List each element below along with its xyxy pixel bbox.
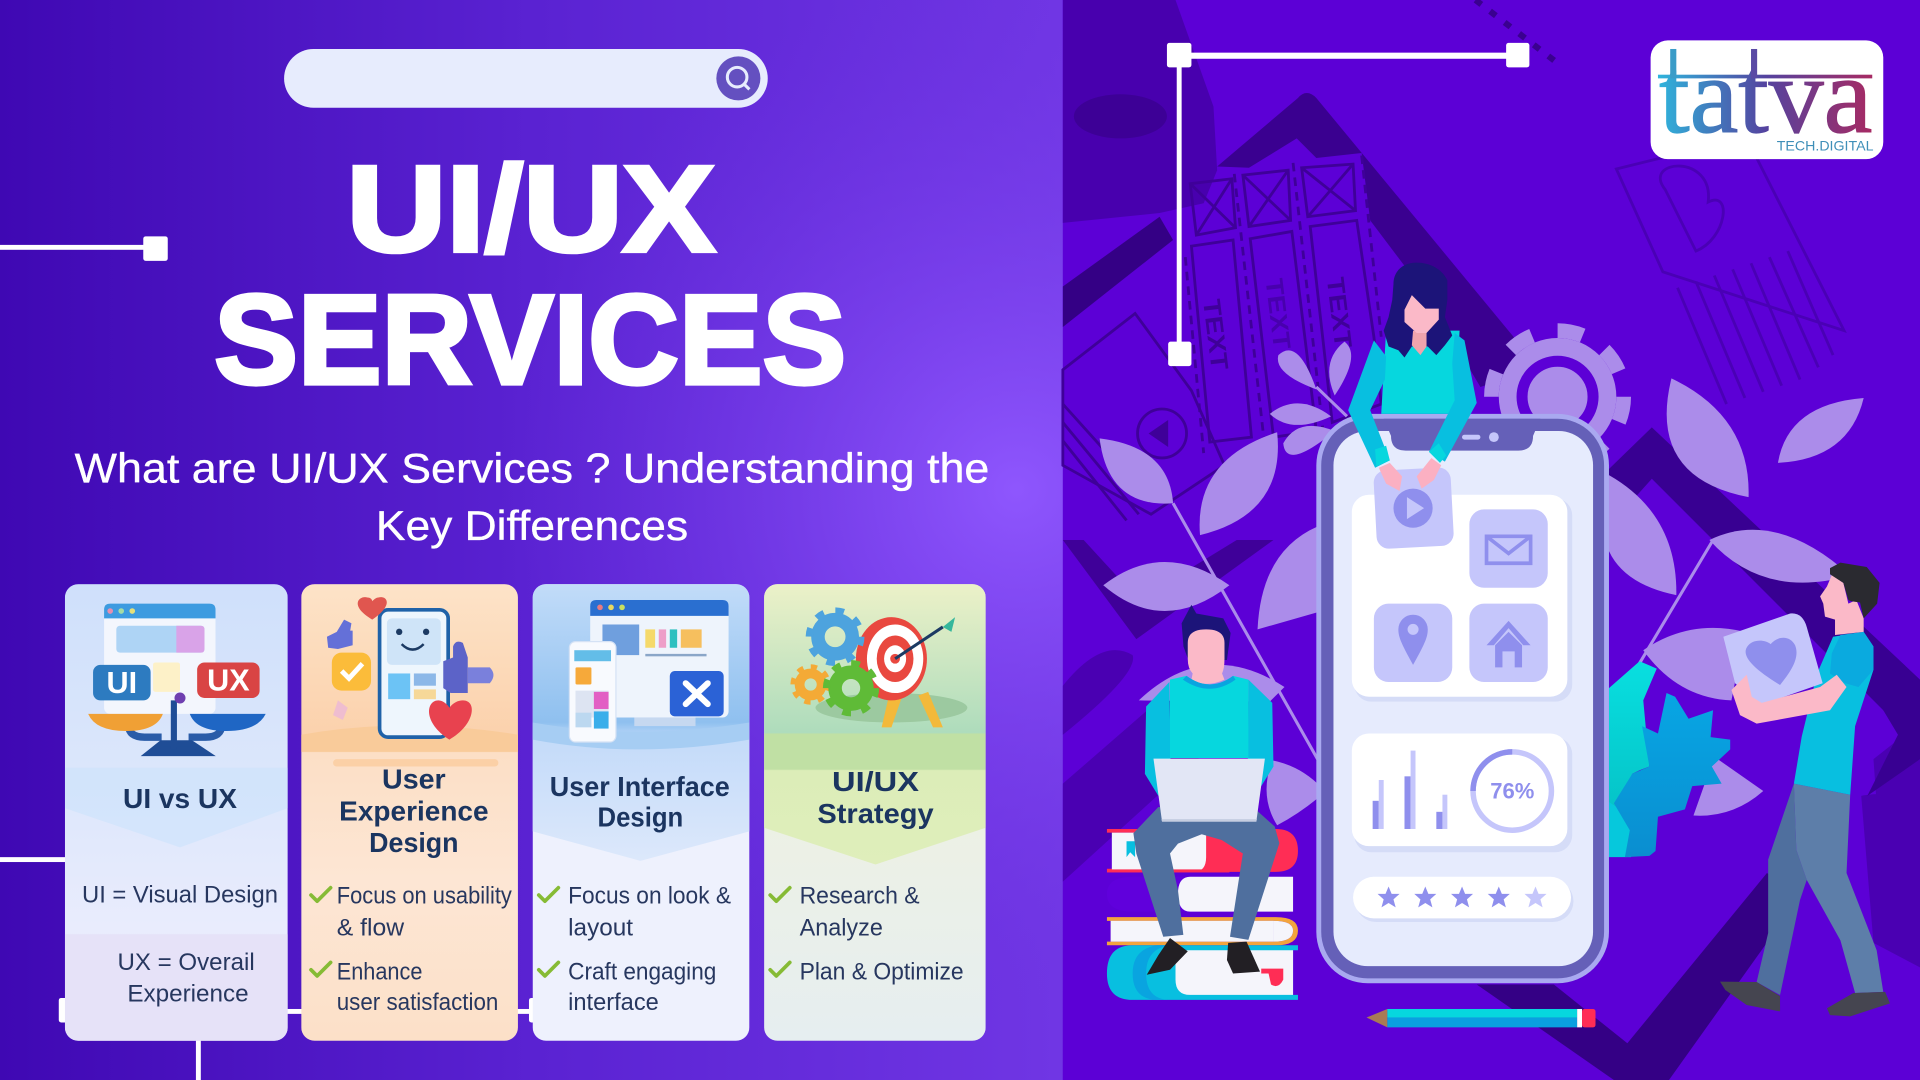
subtitle: Key Differences	[376, 502, 688, 549]
leaves and gear behind phone	[1100, 331, 1864, 825]
subtitle: What are UI/UX Services ? Understanding the	[75, 444, 989, 491]
text: UI equals visual design: UI = Visual Design	[82, 881, 278, 908]
list: usability and satisfaction: & flow	[337, 915, 405, 942]
panel: left purple background	[0, 0, 1063, 1080]
panel: right background with wireframe pattern	[1063, 0, 1920, 1080]
panel: UI vs UX card	[65, 584, 288, 1041]
illustration: books stack	[1107, 829, 1298, 1000]
icon: desktop and mobile interface	[569, 600, 729, 742]
connector: left upper handle	[0, 236, 168, 261]
list: look and engagement: Focus on look &	[568, 883, 731, 910]
panel: right background with wireframe pattern: TEXT	[1260, 277, 1295, 351]
list: research and optimize: Research &	[800, 883, 920, 910]
title: SERVICES	[214, 268, 846, 410]
screen card: chart and 76 percent gauge	[1352, 733, 1572, 852]
panel: User Experience Design card	[301, 584, 518, 1041]
text: UX equals overall experience	[118, 949, 255, 1008]
heading: User Experience Design	[339, 764, 489, 858]
screen card: star rating	[1353, 877, 1573, 922]
list: usability and satisfaction: Focus on usability	[337, 883, 512, 910]
text: UX equals overall experience: Experience	[127, 981, 249, 1008]
list: usability and satisfaction: user satisfaction	[337, 989, 498, 1016]
heading: User Experience Design: User	[382, 764, 446, 795]
list: look and engagement: layout	[568, 915, 633, 942]
list: usability and satisfaction: Enhance	[337, 959, 422, 986]
heading: UI vs UX: UI vs UX	[123, 783, 237, 814]
heading: UI/UX Strategy: UI/UX	[832, 766, 919, 797]
list: look and engagement: Craft engaging	[568, 959, 716, 986]
icon: UI UX balance scale: UX	[207, 664, 250, 698]
heading: User Interface Design: User Interface	[550, 771, 730, 802]
screen card: app tiles	[1352, 495, 1572, 702]
icon: UI UX balance scale	[88, 604, 266, 753]
icon: UI UX balance scale: UI	[107, 666, 137, 700]
panel: right background with wireframe pattern: TEXT	[1321, 276, 1356, 349]
heading: User Experience Design: Design	[369, 827, 459, 858]
panel: UI/UX Strategy card	[764, 584, 986, 1041]
screen card: chart and 76 percent gauge: 76%	[1490, 778, 1535, 803]
illustration: standing man with heart tablet	[1720, 563, 1890, 1016]
illustration: seated man with laptop	[1133, 605, 1279, 975]
panel: right background with wireframe pattern: TEXT	[1197, 298, 1233, 372]
list: look and engagement: interface	[568, 989, 659, 1016]
heading: User Interface Design	[550, 771, 730, 833]
list: usability and satisfaction	[311, 883, 512, 1016]
text: UX equals overall experience: UX = Overail	[118, 949, 255, 976]
heading: UI/UX Strategy	[817, 766, 934, 829]
panel: User Interface Design card	[533, 584, 749, 1041]
list: look and engagement	[539, 883, 731, 1016]
bracket: white handles top right	[1167, 43, 1529, 366]
list: research and optimize: Analyze	[800, 915, 883, 942]
icon: smiling phone with thumbs and heart	[327, 597, 493, 740]
subtitle	[75, 444, 989, 549]
illustration: pencil	[1367, 1009, 1596, 1027]
heading: User Interface Design: Design	[598, 802, 683, 833]
list: research and optimize: Plan & Optimize	[800, 959, 964, 986]
heading: User Experience Design: Experience	[339, 795, 489, 826]
title: UI/UX	[347, 140, 715, 277]
connectors behind cards	[0, 857, 536, 1080]
logo: tatva tech digital: TECH.DIGITAL	[1777, 138, 1874, 154]
list: research and optimize	[770, 883, 964, 986]
play tile	[1373, 467, 1454, 549]
heading: UI/UX Strategy: Strategy	[817, 798, 934, 829]
search bar	[284, 49, 768, 108]
logo: tatva tech digital: tatva	[1659, 37, 1872, 156]
illustration: blue plant	[1609, 661, 1730, 857]
illustration: phone	[1316, 414, 1609, 983]
title	[214, 140, 846, 410]
illustration: woman leaning over phone	[1348, 263, 1477, 549]
icon: gears and target	[793, 611, 967, 727]
